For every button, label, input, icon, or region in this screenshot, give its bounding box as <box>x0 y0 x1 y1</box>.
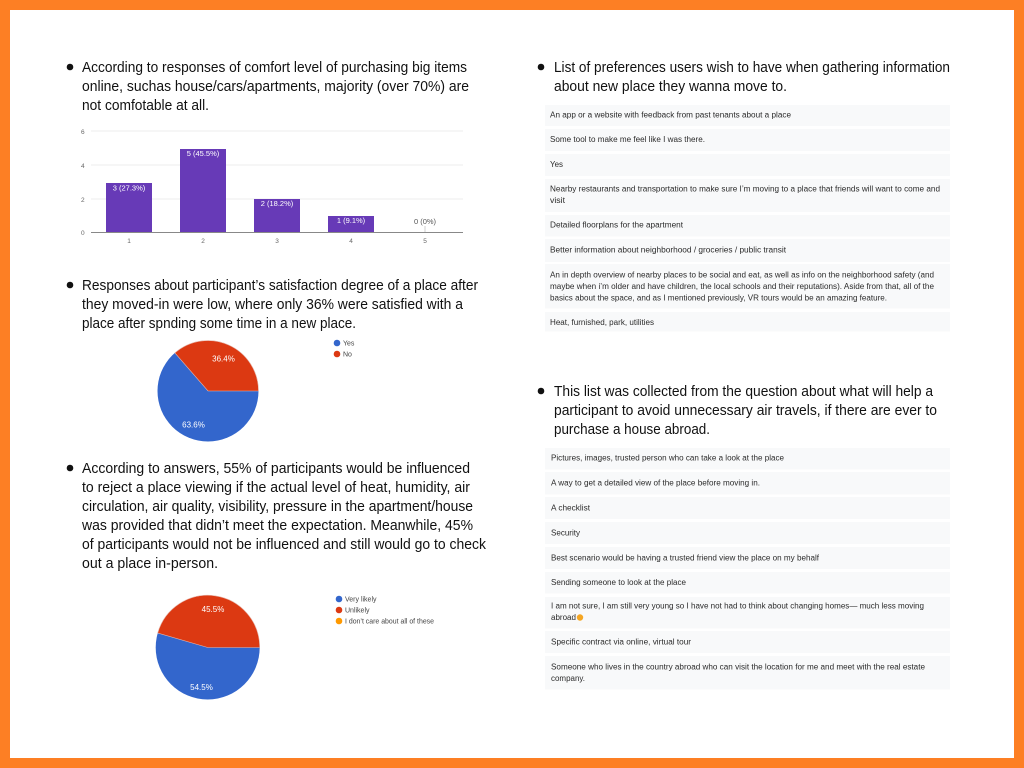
bar chart: comfort level responses <box>81 129 463 245</box>
text block: list of preferences intro <box>538 60 950 95</box>
bar chart: comfort level responses: 0 <box>81 230 85 237</box>
panel: air travel responses list: I am not sure, I am still very young so I have not had to think about changing homes— much less moving <box>551 602 924 610</box>
text block: avoiding air travel intro: purchase a house abroad. <box>554 422 710 438</box>
text block: influence of environmental data on viewing: According to answers, 55% of participants would be influenced <box>82 461 470 477</box>
text block: satisfaction after moving in <box>67 278 478 332</box>
text block: influence of environmental data on viewing: was provided that didn’t meet the expectation. Meanwhile, 45% <box>81 518 473 534</box>
pie chart: satisfaction: 36.4% <box>212 354 235 364</box>
text block: influence of environmental data on viewing <box>67 461 487 572</box>
bar chart: comfort level responses: 1 <box>127 238 131 245</box>
panel: preference responses list: Nearby restaurants and transportation to make sure I’m moving to a place that friends will want to come and <box>550 184 940 194</box>
panel: air travel responses list: Security <box>551 528 580 538</box>
bar chart: comfort level responses: 6 <box>81 129 85 136</box>
text block: comfort level of purchasing big items <box>67 60 469 114</box>
bar chart: comfort level responses: 3 <box>275 238 279 245</box>
bar chart: comfort level responses: 0 (0%) <box>414 217 437 226</box>
panel: preference responses list <box>545 105 950 332</box>
panel: air travel responses list: Sending someone to look at the place <box>551 578 687 587</box>
bar chart: comfort level responses: 5 <box>423 238 427 245</box>
panel: preference responses list: Yes <box>550 160 563 169</box>
pie chart: satisfaction <box>158 340 258 442</box>
panel: preference responses list: Better information about neighborhood / groceries / public transit <box>550 246 787 254</box>
bar chart: comfort level responses: 4 <box>349 238 353 245</box>
panel: preference responses list: An app or a website with feedback from past tenants about a place <box>550 110 792 120</box>
pie chart: likelihood of rejecting a viewing: 54.5% <box>190 683 213 692</box>
panel: air travel responses list: Pictures, images, trusted person who can take a look at the place <box>551 454 785 462</box>
text block: satisfaction after moving in: they moved-in were low, where only 36% were satisfied with a <box>82 297 464 313</box>
panel: air travel responses list: Specific contract via online, virtual tour <box>551 638 691 646</box>
legend: satisfaction pie <box>334 340 355 358</box>
panel: air travel responses list: Someone who lives in the country abroad who can visit the location for me and meet with the real estate <box>551 662 926 672</box>
panel: preference responses list: An in depth overview of nearby places to be social and eat, as well as info on the neighborhood safety (and <box>550 270 934 280</box>
panel: air travel responses list: A checklist <box>551 504 591 512</box>
text block: avoiding air travel intro <box>538 384 937 438</box>
panel: preference responses list: visit <box>550 196 566 205</box>
bar chart: comfort level responses: 1 (9.1%) <box>337 216 366 225</box>
legend: likelihood pie: I don’t care about all of these <box>345 618 434 626</box>
text block: influence of environmental data on viewing: to reject a place viewing if the actual level of heat, humidity, air <box>82 480 470 496</box>
text block: comfort level of purchasing big items: According to responses of comfort level of purchasing big items <box>82 60 467 76</box>
text block: satisfaction after moving in: place after spnding some time in a new place. <box>82 316 356 332</box>
text block: avoiding air travel intro: This list was collected from the question about what will help a <box>554 384 934 400</box>
text block: influence of environmental data on viewing: circulation, air quality, visibility, pressure in the apartment/house <box>82 499 473 515</box>
text block: list of preferences intro: about new place they wanna move to. <box>554 79 787 95</box>
legend: likelihood pie: Unlikely <box>345 608 370 614</box>
panel: preference responses list: maybe when i’m older and have children, the local schools and their reputations). Aside from that, all of the <box>550 282 935 291</box>
bar chart: comfort level responses: 4 <box>81 163 85 170</box>
text block: comfort level of purchasing big items: not comfotable at all. <box>82 98 209 114</box>
panel: preference responses list: Detailed floorplans for the apartment <box>550 220 684 230</box>
bar chart: comfort level responses: 2 <box>81 197 85 204</box>
text block: influence of environmental data on viewing: of participants would not be influenced and still would go to check <box>82 537 487 553</box>
text block: influence of environmental data on viewing: out a place in-person. <box>82 556 218 572</box>
bar chart: comfort level responses: 2 <box>201 238 205 245</box>
panel: air travel responses list: company. <box>551 674 585 683</box>
panel: preference responses list: basics about the space, and as I mentioned previously, VR tours would be an amazing feature. <box>550 294 887 302</box>
text block: satisfaction after moving in: Responses about participant’s satisfaction degree of a place after <box>82 278 478 294</box>
bar chart: comfort level responses: 5 (45.5%) <box>187 149 220 158</box>
legend: likelihood pie: Very likely <box>345 596 377 604</box>
panel: air travel responses list: A way to get a detailed view of the place before moving in. <box>551 478 760 488</box>
pie chart: satisfaction: 63.6% <box>182 420 205 430</box>
text block: comfort level of purchasing big items: online, suchas house/cars/apartments, majority (over 70%) are <box>82 79 469 95</box>
bar chart: comfort level responses: 3 (27.3%) <box>113 184 146 192</box>
panel: air travel responses list: Best scenario would be having a trusted friend view the place on my behalf <box>551 554 820 562</box>
panel: preference responses list: Heat, furnished, park, utilities <box>550 318 654 327</box>
legend: satisfaction pie: Yes <box>343 340 355 348</box>
bar chart: comfort level responses: 2 (18.2%) <box>261 199 294 208</box>
panel: air travel responses list <box>545 448 950 690</box>
text block: list of preferences intro: List of preferences users wish to have when gathering information <box>554 60 950 76</box>
legend: likelihood pie <box>336 596 434 626</box>
text block: avoiding air travel intro: participant to avoid unnecessary air travels, if there are ever to <box>554 403 937 419</box>
panel: preference responses list: Some tool to make me feel like I was there. <box>550 135 705 144</box>
panel: air travel responses list: abroad <box>551 613 576 622</box>
legend: satisfaction pie: No <box>343 352 352 358</box>
pie chart: likelihood of rejecting a viewing <box>156 595 260 700</box>
pie chart: likelihood of rejecting a viewing: 45.5% <box>202 605 224 614</box>
